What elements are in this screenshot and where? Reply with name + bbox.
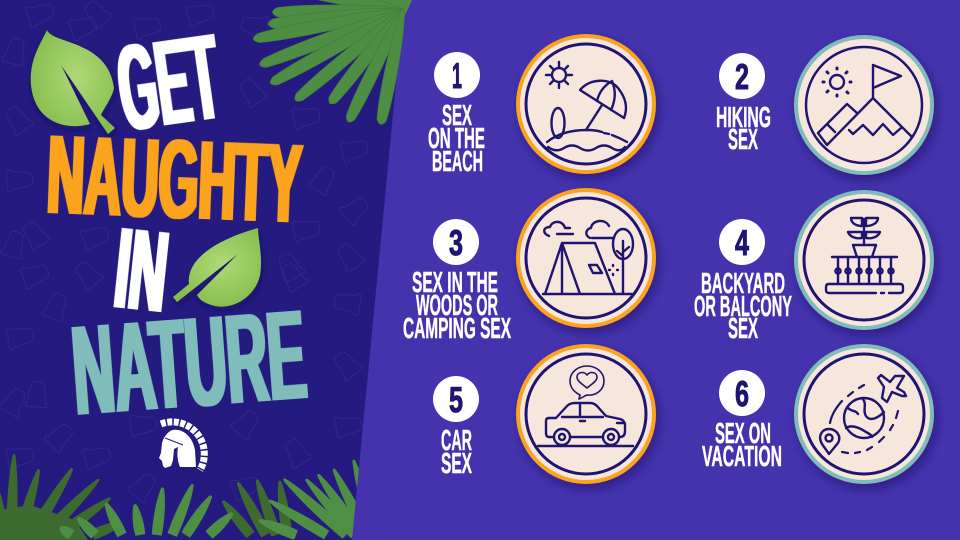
- item 1: label: ON THE: [428, 123, 485, 155]
- item 3: number: 3: [449, 222, 463, 263]
- item 5: label: SEX: [441, 448, 472, 480]
- item 1: label: [428, 100, 485, 178]
- badge 1: beach: [516, 34, 656, 174]
- item 3: label: CAMPING SEX: [403, 313, 511, 345]
- palm: bottom left dark fan: [0, 454, 123, 540]
- item 1: label: BEACH: [432, 146, 483, 178]
- item 6: number: [719, 370, 765, 416]
- badge 4: balcony: [794, 190, 934, 330]
- item 4: label: SEX: [728, 313, 758, 345]
- icon: large leaf: [31, 30, 115, 134]
- item 4: number: [719, 219, 765, 265]
- item 2: number: 2: [735, 56, 749, 97]
- item 3: label: SEX IN THE: [412, 267, 498, 299]
- item 4: label: OR BALCONY: [694, 291, 792, 323]
- item 6: label: [702, 418, 782, 473]
- text: CAR: [441, 425, 472, 457]
- item 4: label: BACKYARD: [701, 268, 785, 300]
- item 2: label: SEX: [728, 124, 758, 156]
- badge 2: mountain: [794, 35, 934, 175]
- item 3: number: [433, 219, 479, 265]
- icon: car with heart bubble: [538, 366, 633, 446]
- item 3: label: WOODS OR: [416, 290, 498, 322]
- item 5: label: [441, 425, 472, 480]
- item 2: label: [716, 102, 771, 156]
- icon: globe, plane and pin: [820, 375, 906, 454]
- item 4: label: [694, 268, 792, 345]
- item 4: number: 4: [735, 222, 749, 263]
- item 1: number: [434, 52, 480, 98]
- right purple panel: [352, 0, 960, 540]
- icon: balcony with plant: [826, 218, 903, 293]
- icon: mountain with flag: [818, 65, 912, 145]
- palm: bottom middle fan: [57, 482, 236, 539]
- item 5: number: [433, 376, 479, 422]
- title: IN: IN: [109, 203, 174, 337]
- item 1: label: SEX: [442, 100, 472, 132]
- item 6: label: VACATION: [702, 441, 782, 473]
- item 3: label: [403, 267, 511, 345]
- badge 3: tent: [516, 188, 656, 328]
- badge 5: car: [516, 344, 656, 484]
- palm: bottom right dark fan: [219, 478, 293, 538]
- background pattern: [0, 0, 372, 503]
- title: NAUGHTY: NAUGHTY: [45, 111, 304, 247]
- icon: spartan helmet logo: [159, 422, 204, 470]
- item 6: number: 6: [735, 373, 749, 414]
- title: NATURE: NATURE: [68, 283, 311, 443]
- item 2: number: [719, 53, 765, 99]
- item 6: label: SEX ON: [715, 418, 771, 450]
- item 5: number: 5: [449, 379, 463, 420]
- icon: tent, clouds and tree: [543, 221, 633, 294]
- title: GET: GET: [110, 8, 228, 157]
- badge 6: vacation: [794, 344, 934, 484]
- icon: small leaf: [173, 228, 261, 307]
- icon: beach umbrella scene: [546, 62, 627, 150]
- palm: top right fan: [252, 0, 412, 125]
- item 1: number: 1: [452, 55, 462, 96]
- palm: bottom right light fan: [257, 458, 380, 540]
- item 2: label: HIKING: [716, 102, 771, 134]
